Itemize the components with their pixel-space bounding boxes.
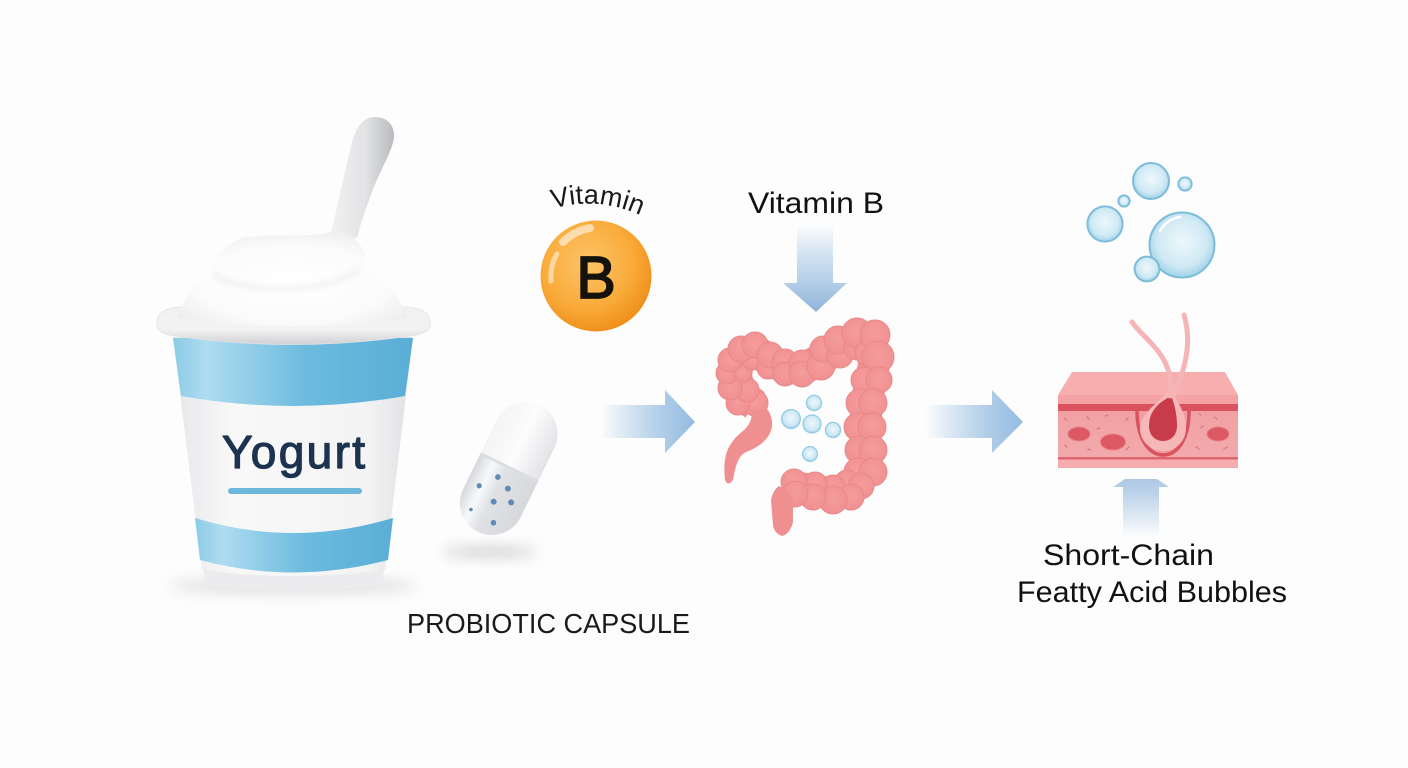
label: Vitamin B: Vitamin B: [748, 187, 884, 220]
icon: yogurt cup: [157, 117, 430, 594]
icon: probiotic capsule: [407, 391, 690, 639]
arrow: Vitamin B down: [783, 225, 847, 312]
follicle bulb: [1149, 396, 1177, 441]
yogurt label: Yogurt: [222, 426, 365, 478]
icon: vitamin B sphere: [540, 185, 652, 332]
first line: Short-Chain: [1043, 539, 1214, 572]
upper white half: [480, 391, 568, 482]
bubbles inside colon: [782, 395, 841, 461]
probiotic dots: [464, 468, 523, 530]
top layer: [1058, 395, 1238, 404]
seam: [480, 452, 539, 483]
capsule label: PROBIOTIC CAPSULE: [407, 608, 690, 639]
cup body: [173, 337, 413, 576]
cup shadow: [168, 578, 418, 594]
capsule shadow: [442, 547, 538, 557]
colon bottom tail: [771, 486, 793, 536]
colon tube base: [735, 340, 874, 494]
tissue front face: [1058, 395, 1238, 468]
hair strands: [1132, 315, 1188, 396]
arrow: up to tissue: [1113, 479, 1169, 537]
capsule body: [449, 391, 568, 546]
label: short-chain fatty acid bubbles: [1017, 539, 1287, 609]
arc for curved label: [543, 204, 650, 220]
orange sphere: [540, 220, 652, 332]
bubble highlight: [1160, 217, 1180, 231]
follicle lining: [1140, 392, 1186, 451]
arrow: colon to tissue: [925, 390, 1023, 453]
tissue specks: [1064, 414, 1227, 450]
lower layer line: [1058, 457, 1238, 460]
curved vitamin label: Vitamin: [549, 185, 643, 214]
upper blue band: [173, 338, 413, 406]
icon: fatty acid bubbles: [1087, 163, 1214, 281]
sphere highlight top: [563, 228, 590, 242]
yogurt dome: [178, 232, 407, 326]
tissue top face: [1058, 372, 1238, 395]
follicle wall: [1137, 411, 1189, 455]
label underline: [228, 488, 362, 494]
rim: [157, 307, 430, 344]
letter B: B: [576, 245, 616, 311]
cup base: [203, 562, 384, 591]
sphere highlight left: [551, 254, 557, 281]
yogurt swirl shading: [214, 268, 360, 289]
arrow: capsule to colon: [600, 390, 695, 453]
icon: colon: [716, 318, 894, 536]
dark layer: [1058, 404, 1238, 411]
spoon: [330, 117, 394, 238]
colon left tail: [724, 409, 772, 484]
lower blue band: [195, 518, 393, 572]
colon lobes: [716, 318, 894, 514]
lower transparent half: [449, 454, 538, 546]
icon: gut tissue cross-section: [1058, 315, 1238, 468]
second line: Featty Acid Bubbles: [1017, 576, 1287, 609]
blood cells: [1068, 427, 1229, 450]
